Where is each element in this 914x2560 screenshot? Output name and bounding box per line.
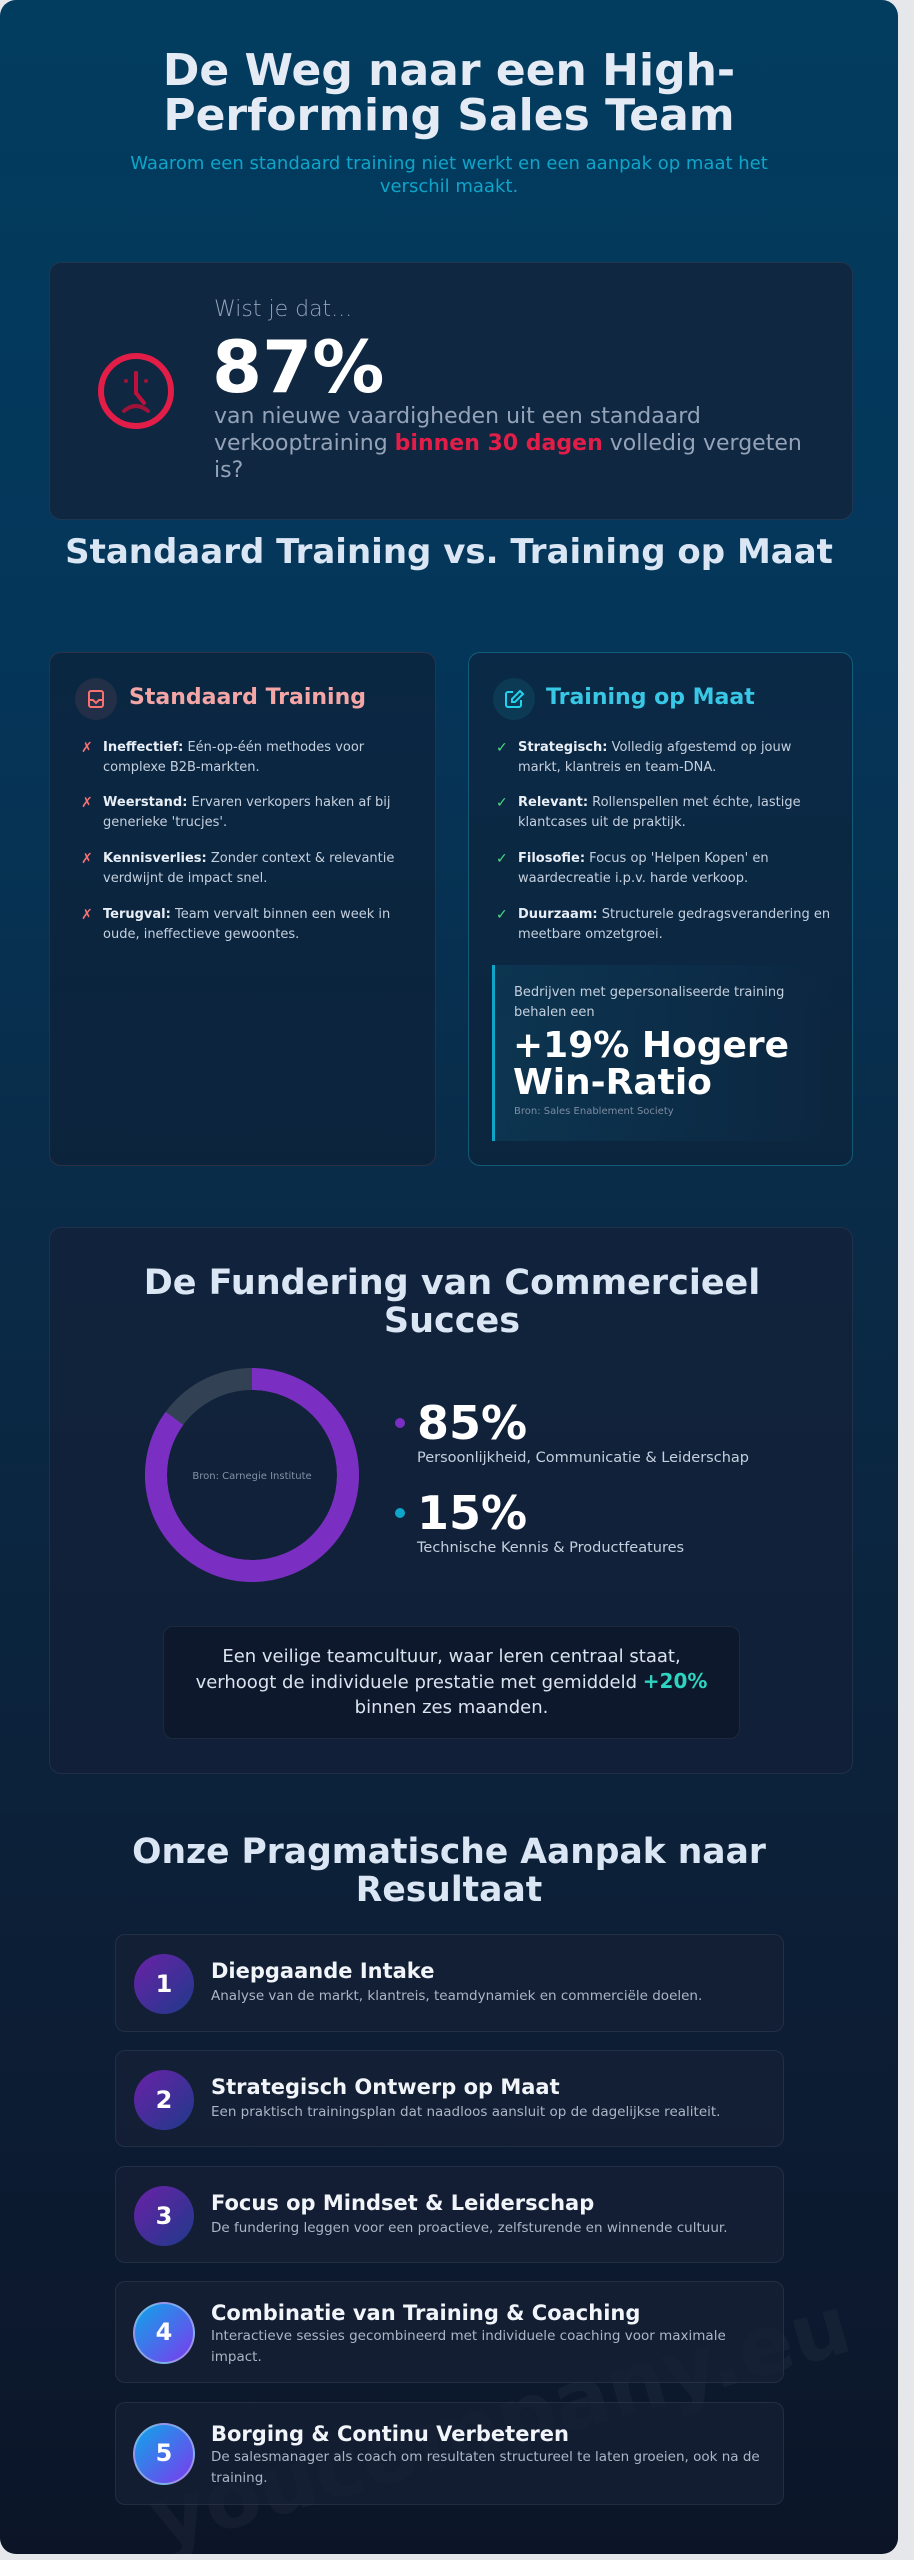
panel: stat card [49, 262, 853, 520]
heading: De Fundering van Commercieel [144, 1263, 760, 1303]
step 2: Een praktisch trainingsplan dat naadloos aansluit op de dagelijkse realiteit. [211, 2104, 720, 2120]
title: Performing Sales Team [163, 90, 735, 141]
step 3: De fundering leggen voor een proactieve, zelfsturende en winnende cultuur. [211, 2220, 728, 2236]
bullet list: Strategisch: Volledig afgestemd op jouw markt, klantreis en team-DNA. [518, 740, 791, 775]
card title: Standaard Training [129, 685, 366, 710]
step 5: 5 [156, 2439, 172, 2467]
callout: win ratio [492, 965, 832, 1141]
bullet list: Kennisverlies: Zonder context & relevantie verdwijnt de impact snel. [103, 851, 394, 886]
panel: training op maat: ✓ [496, 907, 508, 923]
callout: win ratio: Win-Ratio [513, 1062, 712, 1103]
panel: standaard training: ✗ [81, 795, 93, 811]
step 2 [115, 2050, 784, 2147]
legend: 15%: Technische Kennis & Productfeatures [417, 1540, 684, 1556]
step 1: Diepgaande Intake [211, 1959, 434, 1983]
subtitle: Waarom een standaard training niet werkt en een aanpak op maat het verschil maakt. [130, 153, 768, 197]
bullet list [496, 740, 830, 942]
heading [144, 1263, 760, 1341]
step 5 [115, 2402, 784, 2505]
panel: training op maat [468, 652, 853, 1166]
step 4: Interactieve sessies gecombineerd met individuele coaching voor maximale impact. [211, 2328, 726, 2365]
step 2: Strategisch Ontwerp op Maat [211, 2075, 560, 2099]
panel: standaard training [49, 652, 436, 1166]
callout: win ratio: Bron: Sales Enablement Society [514, 1106, 674, 1117]
step 1: 1 [156, 1970, 172, 1998]
callout: win ratio: +19% Hogere [513, 1025, 789, 1066]
step 3 [115, 2166, 784, 2263]
legend: 85% [395, 1396, 749, 1466]
step 4 [115, 2281, 784, 2383]
heading: aanpak: Onze Pragmatische Aanpak naar [132, 1832, 766, 1872]
icon: sad clock [98, 353, 174, 429]
donut chart: Bron: Carnegie Institute [192, 1471, 312, 1482]
heading: aanpak: Resultaat [356, 1870, 542, 1910]
step 4: 4 [156, 2318, 172, 2346]
bullet list: Relevant: Rollenspellen met échte, lastige klantcases uit de praktijk. [518, 795, 801, 830]
heading: comparison: Standaard Training vs. Training op Maat [65, 532, 833, 572]
step 1 [115, 1934, 784, 2032]
heading: Succes [384, 1301, 520, 1341]
step 1: Analyse van de markt, klantreis, teamdynamiek en commerciële doelen. [211, 1988, 702, 2004]
panel: standaard training: ✗ [81, 851, 93, 867]
panel: training op maat: ✓ [496, 740, 508, 756]
step 3: Focus op Mindset & Leiderschap [211, 2191, 594, 2215]
step 2: 2 [156, 2086, 172, 2114]
legend: 85%: 85% [417, 1396, 527, 1450]
panel: standaard training: ✗ [81, 740, 93, 756]
title: De Weg naar een High- [163, 45, 735, 96]
step 5: De salesmanager als coach om resultaten structureel te laten groeien, ook na de training. [211, 2449, 760, 2486]
panel: standaard training: ✗ [81, 907, 93, 923]
callout: teamcultuur: verhoogt de individuele prestatie met gemiddeld +20% [196, 1669, 707, 1693]
callout: teamcultuur [163, 1626, 740, 1739]
title [163, 45, 735, 141]
legend: 85%: Persoonlijkheid, Communicatie & Leiderschap [417, 1450, 749, 1466]
panel: fundering [49, 1227, 853, 1774]
icon: pencil [493, 678, 535, 720]
callout: teamcultuur: binnen zes maanden. [355, 1697, 548, 1718]
step 3: 3 [156, 2202, 172, 2230]
step 4: Combinatie van Training & Coaching [211, 2301, 640, 2325]
bullet list: Ineffectief: Eén-op-één methodes voor complexe B2B-markten. [103, 740, 364, 775]
callout: teamcultuur: Een veilige teamcultuur, waar leren centraal staat, [222, 1646, 681, 1667]
step 5: Borging & Continu Verbeteren [211, 2422, 569, 2446]
bullet list: Terugval: Team vervalt binnen een week in oude, ineffectieve gewoontes. [103, 907, 390, 942]
card title: Training op Maat [546, 685, 755, 710]
bullet list [81, 740, 394, 942]
donut chart [145, 1368, 359, 1582]
big stat 87%: 87% [212, 325, 384, 409]
legend: 15%: 15% [417, 1486, 527, 1540]
bullet list: Filosofie: Focus op 'Helpen Kopen' en waardecreatie i.p.v. harde verkoop. [518, 851, 769, 886]
text: wist je dat: Wist je dat... [214, 297, 352, 322]
callout: win ratio: Bedrijven met gepersonaliseerde training behalen een [514, 985, 784, 1020]
legend: 15% [395, 1486, 684, 1556]
icon: inbox [75, 678, 117, 720]
bullet list: Weerstand: Ervaren verkopers haken af bij generieke 'trucjes'. [103, 795, 391, 830]
panel: training op maat: ✓ [496, 851, 508, 867]
panel: training op maat: ✓ [496, 795, 508, 811]
stat description: van nieuwe vaardigheden uit een standaard verkooptraining binnen 30 dagen volledig vergeten is? [214, 404, 802, 483]
heading: aanpak [132, 1832, 766, 1910]
bullet list: Duurzaam: Structurele gedragsverandering en meetbare omzetgroei. [518, 907, 830, 942]
